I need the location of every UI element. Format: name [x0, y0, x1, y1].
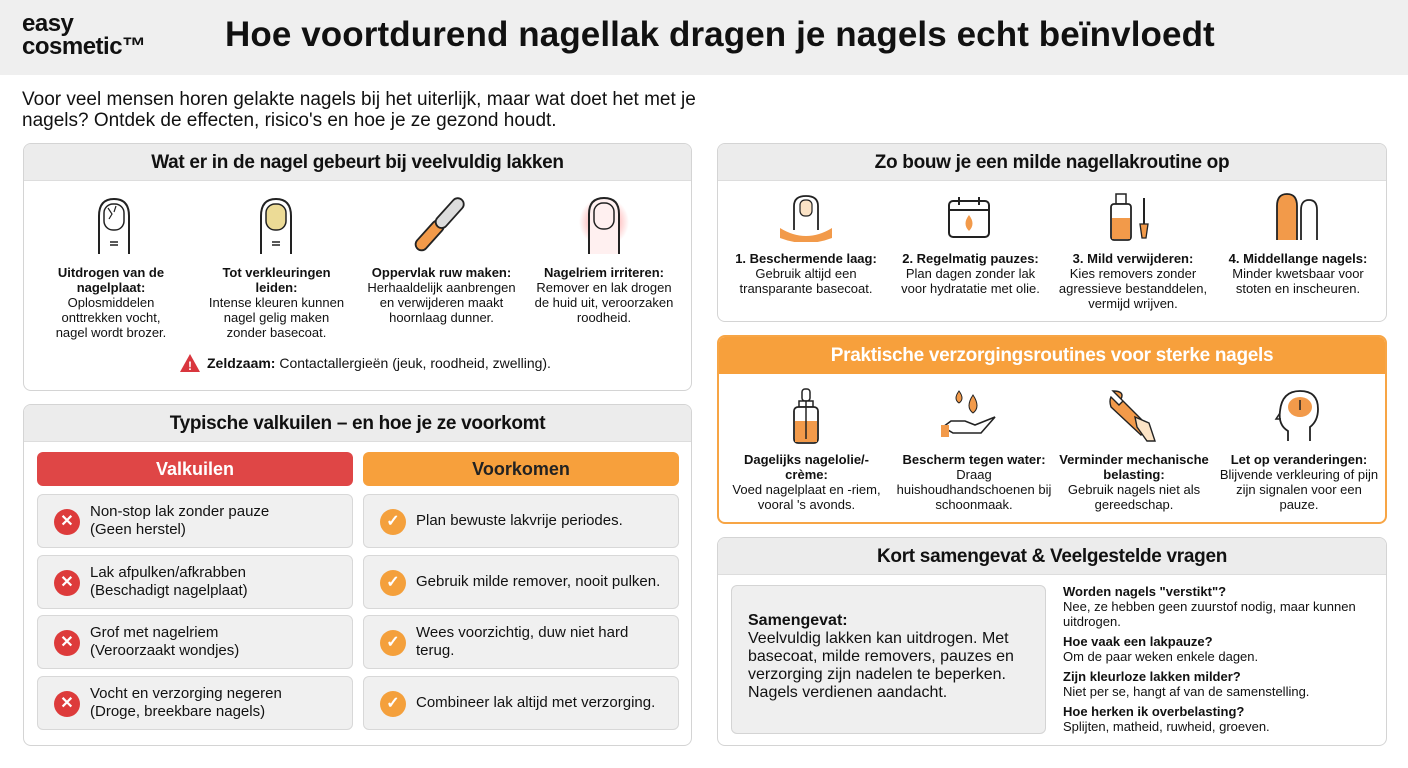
pitfall 1 — [37, 494, 353, 548]
item 2 — [901, 251, 1040, 296]
item 4 — [1228, 251, 1367, 296]
item: mechanisch: Gebruik nagels niet als gereedschap. — [1068, 482, 1200, 512]
prevention 4: ✓ — [386, 695, 400, 712]
item 3: 3. Mild verwijderen: — [1073, 251, 1193, 266]
prevention 3: terug. — [416, 642, 454, 659]
icon: irritated cuticle — [580, 197, 628, 254]
pitfall 4: ✕ — [60, 695, 74, 712]
prevention 4 — [363, 676, 679, 730]
item: water: Bescherm tegen water: — [902, 452, 1046, 467]
pitfall 3 — [37, 615, 353, 669]
heading — [24, 405, 691, 442]
icon: cracked nail — [98, 198, 130, 254]
item: verkleuringen — [209, 265, 344, 340]
item: dagelijks: Dagelijks nagelolie/-crème: — [744, 452, 869, 482]
item: water: Draag huishoudhandschoenen bij schoonmaak. — [897, 467, 1051, 512]
item 1: 1. Beschermende laag: — [735, 251, 877, 266]
pitfall 2: ✕ — [60, 574, 74, 591]
item: uitdrogen: Oplosmiddelen onttrekken vocht, nagel wordt brozer. — [56, 295, 166, 340]
pitfall 2 — [37, 555, 353, 609]
warning note: Zeldzaam: Contactallergieën (jeuk, roodheid, zwelling). — [207, 355, 551, 371]
heading: Zo bouw je een milde nagellakroutine op — [875, 152, 1229, 173]
faq list: Nee, ze hebben geen zuurstof nodig, maar kunnen uitdrogen. — [1063, 599, 1356, 629]
item: mechanisch: Verminder mechanische belasting: — [1059, 452, 1209, 482]
item: nagelriem: Nagelriem irriteren: — [544, 265, 664, 280]
prevention 2: Gebruik milde remover, nooit pulken. — [416, 573, 660, 590]
panel: pitfalls — [23, 404, 692, 746]
icon: base coat — [780, 195, 832, 242]
item: nagelriem: Remover en lak drogen de huid uit, veroorzaken roodheid. — [535, 280, 673, 325]
summary box — [731, 585, 1046, 734]
item: uitdrogen: Uitdrogen van de nagelplaat: — [58, 265, 164, 295]
icon: hand water — [941, 390, 996, 437]
icon: remover bottle — [1110, 193, 1149, 241]
heading: Praktische verzorgingsroutines voor sterke nagels — [831, 345, 1273, 366]
pitfall 4: (Droge, breekbare nagels) — [90, 703, 265, 720]
logo: cosmetic™ — [22, 33, 146, 60]
item: verkleuringen: Tot verkleuringen leiden: — [222, 265, 331, 295]
heading — [718, 144, 1386, 181]
panel: practical routines — [717, 335, 1387, 524]
valkuilen header — [37, 452, 353, 486]
prevention 3: Wees voorzichtig, duw niet hard — [416, 624, 628, 641]
item: verkleuringen: Intense kleuren kunnen nagel gelig maken zonder basecoat. — [209, 295, 344, 340]
icon: wrench hand — [1109, 390, 1156, 442]
pitfall 4 — [37, 676, 353, 730]
item 1: Gebruik altijd een transparante basecoat. — [740, 266, 872, 296]
faq list: Zijn kleurloze lakken milder? — [1063, 669, 1241, 684]
pitfall 1: (Geen herstel) — [90, 521, 186, 538]
faq list — [1063, 584, 1356, 734]
faq list: Worden nagels "verstikt"? — [1063, 584, 1226, 599]
faq list: Hoe herken ik overbelasting? — [1063, 704, 1244, 719]
prevention 2: ✓ — [386, 574, 400, 591]
icon: yellow nail — [260, 198, 292, 254]
prevention 3: ✓ — [386, 634, 400, 651]
faq list: Splijten, matheid, ruwheid, groeven. — [1063, 719, 1270, 734]
prevention 1 — [363, 494, 679, 548]
heading: Kort samengevat & Veelgestelde vragen — [877, 546, 1227, 567]
item 3: Kies removers zonder agressieve bestanddelen, vermijd wrijven. — [1059, 266, 1207, 311]
panel: summary & faq — [717, 537, 1387, 746]
summary box: Samengevat: — [748, 612, 848, 629]
faq list: Niet per se, hangt af van de samenstelling. — [1063, 684, 1309, 699]
item: dagelijks: Voed nagelplaat en -riem, vooral 's avonds. — [732, 482, 881, 512]
voorkomen header: Voorkomen — [472, 459, 570, 479]
pitfall 1: ✕ — [60, 513, 74, 530]
pitfall 2: Lak afpulken/afkrabben — [90, 564, 246, 581]
prevention 1: ✓ — [386, 513, 400, 530]
icon: nail file — [414, 197, 465, 252]
prevention 4: Combineer lak altijd met verzorging. — [416, 694, 655, 711]
valkuilen header: Valkuilen — [156, 459, 234, 479]
item: dagelijks — [732, 452, 881, 512]
logo: easy — [22, 10, 73, 37]
heading: Wat er in de nagel gebeurt bij veelvuldig lakken — [151, 152, 564, 173]
icon: dropper bottle — [793, 388, 819, 444]
logo — [22, 10, 146, 60]
title: Hoe voortdurend nagellak dragen je nagels echt beïnvloedt — [225, 15, 1215, 54]
panel: what happens — [23, 143, 692, 391]
item 4: 4. Middellange nagels: — [1229, 251, 1367, 266]
pitfall 1: Non-stop lak zonder pauze — [90, 503, 269, 520]
pitfall 3: (Veroorzaakt wondjes) — [90, 642, 239, 659]
pitfall 2: (Beschadigt nagelplaat) — [90, 582, 248, 599]
intro text: Voor veel mensen horen gelakte nagels bij het uiterlijk, maar wat doet het met je nagels? Ontdek de effecten, risico's en hoe je ze gezond houdt. — [22, 89, 696, 131]
prevention 2 — [363, 555, 679, 609]
pitfall 4: Vocht en verzorging negeren — [90, 685, 282, 702]
item: ruw maken: Oppervlak ruw maken: — [372, 265, 511, 280]
panel: mild routine — [717, 143, 1387, 322]
faq list: Hoe vaak een lakpauze? — [1063, 634, 1213, 649]
icon: calendar — [948, 197, 990, 238]
item 2: Plan dagen zonder lak voor hydratatie met olie. — [901, 266, 1040, 296]
item 2: 2. Regelmatig pauzes: — [902, 251, 1039, 266]
heading — [24, 144, 691, 181]
icon: head — [1274, 390, 1319, 441]
item 1 — [735, 251, 877, 296]
prevention 1: Plan bewuste lakvrije periodes. — [416, 512, 623, 529]
voorkomen header — [363, 452, 679, 486]
item: mechanisch — [1059, 452, 1209, 512]
item: ruw maken: Herhaaldelijk aanbrengen en verwijderen maakt hoornlaag dunner. — [367, 280, 516, 325]
item: veranderingen: Blijvende verkleuring of pijn zijn signalen voor een pauze. — [1220, 467, 1378, 512]
faq list: Om de paar weken enkele dagen. — [1063, 649, 1258, 664]
heading — [719, 337, 1385, 374]
item: veranderingen: Let op veranderingen: — [1231, 452, 1367, 467]
heading — [718, 538, 1386, 575]
prevention 3 — [363, 615, 679, 669]
item: uitdrogen — [56, 265, 166, 340]
icon: medium nails — [1276, 193, 1318, 240]
heading: Typische valkuilen – en hoe je ze voorkomt — [170, 413, 545, 434]
pitfall 3: Grof met nagelriem — [90, 624, 218, 641]
warning note: ! — [188, 359, 192, 373]
item 4: Minder kwetsbaar voor stoten en inscheuren. — [1232, 266, 1364, 296]
header band — [0, 0, 1408, 75]
pitfall 3: ✕ — [60, 634, 74, 651]
summary box: Veelvuldig lakken kan uitdrogen. Met basecoat, milde removers, pauzes en verzorging zijn nadelen te beperken. Nagels verdienen aandacht. — [748, 630, 1014, 701]
